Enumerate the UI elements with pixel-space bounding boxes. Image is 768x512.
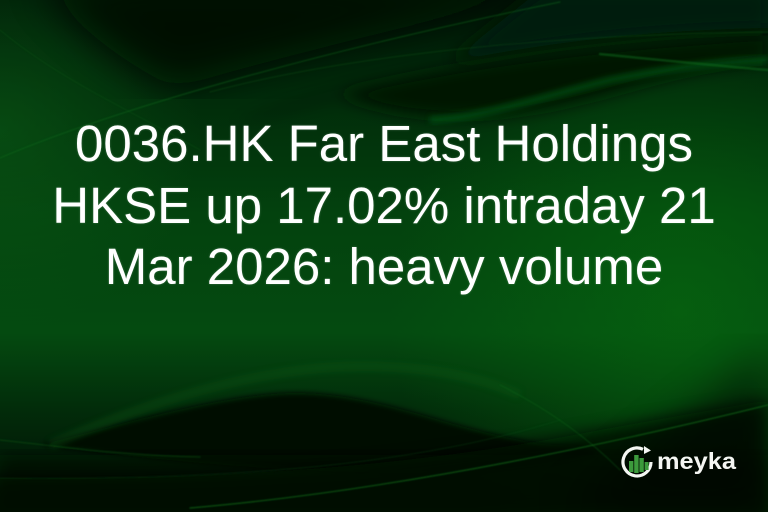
right dark top xyxy=(450,0,768,62)
dark bottom mass xyxy=(40,393,600,473)
logo: meyka xyxy=(621,446,736,478)
wordmark: meyka xyxy=(657,448,736,474)
title: HKSE up 17.02% intraday 21 xyxy=(52,176,716,234)
title: Mar 2026: heavy volume xyxy=(105,238,663,295)
title xyxy=(52,115,716,296)
top dark mass xyxy=(40,0,600,88)
icon: ring with bars xyxy=(623,446,651,476)
title: 0036.HK Far East Holdings xyxy=(75,115,693,172)
bright bands xyxy=(430,60,768,120)
upper dark swoosh xyxy=(230,35,768,125)
